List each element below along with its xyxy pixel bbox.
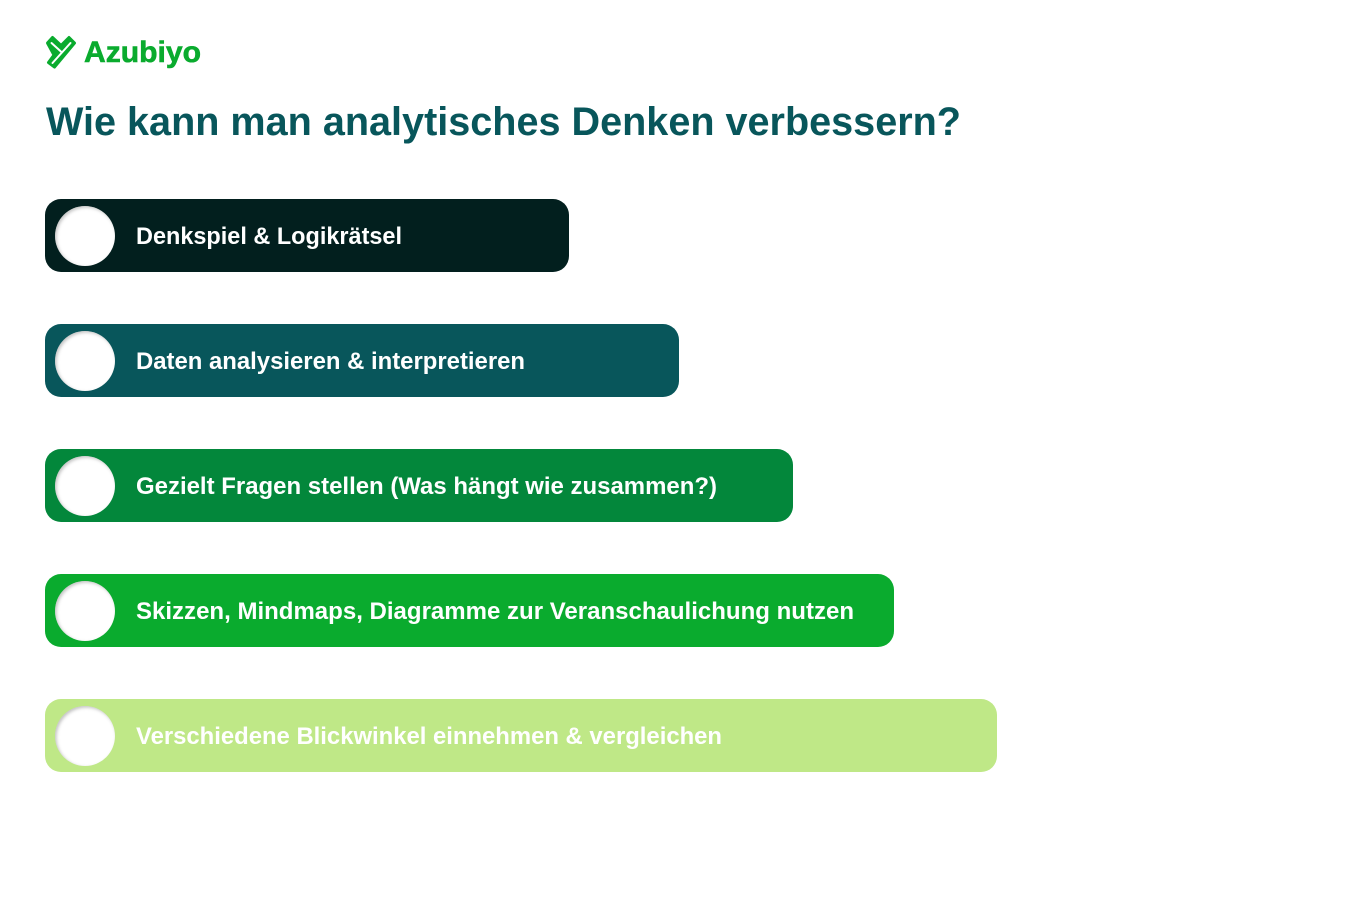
logo: Azubiyo xyxy=(46,36,201,69)
bar: Verschiedene Blickwinkel xyxy=(45,699,997,772)
bar: Gezielt Fragen stellen xyxy=(45,449,793,522)
icon: Azubiyo logo mark xyxy=(48,38,74,67)
bar: Daten analysieren & interpretieren xyxy=(45,324,679,397)
bar: Verschiedene Blickwinkel: Verschiedene Blickwinkel einnehmen & vergleichen xyxy=(136,723,722,750)
title: Wie kann man analytisches Denken verbessern? xyxy=(46,100,961,144)
bar: Denkspiel & Logikrätsel: Denkspiel & Logikrätsel xyxy=(136,223,402,250)
bar: Daten analysieren & interpretieren: Daten analysieren & interpretieren xyxy=(136,348,525,375)
bar: Skizzen, Mindmaps, Diagramme xyxy=(45,574,894,647)
bar: Gezielt Fragen stellen: Gezielt Fragen stellen (Was hängt wie zusammen?) xyxy=(136,473,717,500)
bar: Skizzen, Mindmaps, Diagramme: Skizzen, Mindmaps, Diagramme zur Veranschaulichung nutzen xyxy=(136,598,854,625)
bar: Denkspiel & Logikrätsel xyxy=(45,199,569,272)
logo wordmark: Azubiyo xyxy=(84,36,201,69)
